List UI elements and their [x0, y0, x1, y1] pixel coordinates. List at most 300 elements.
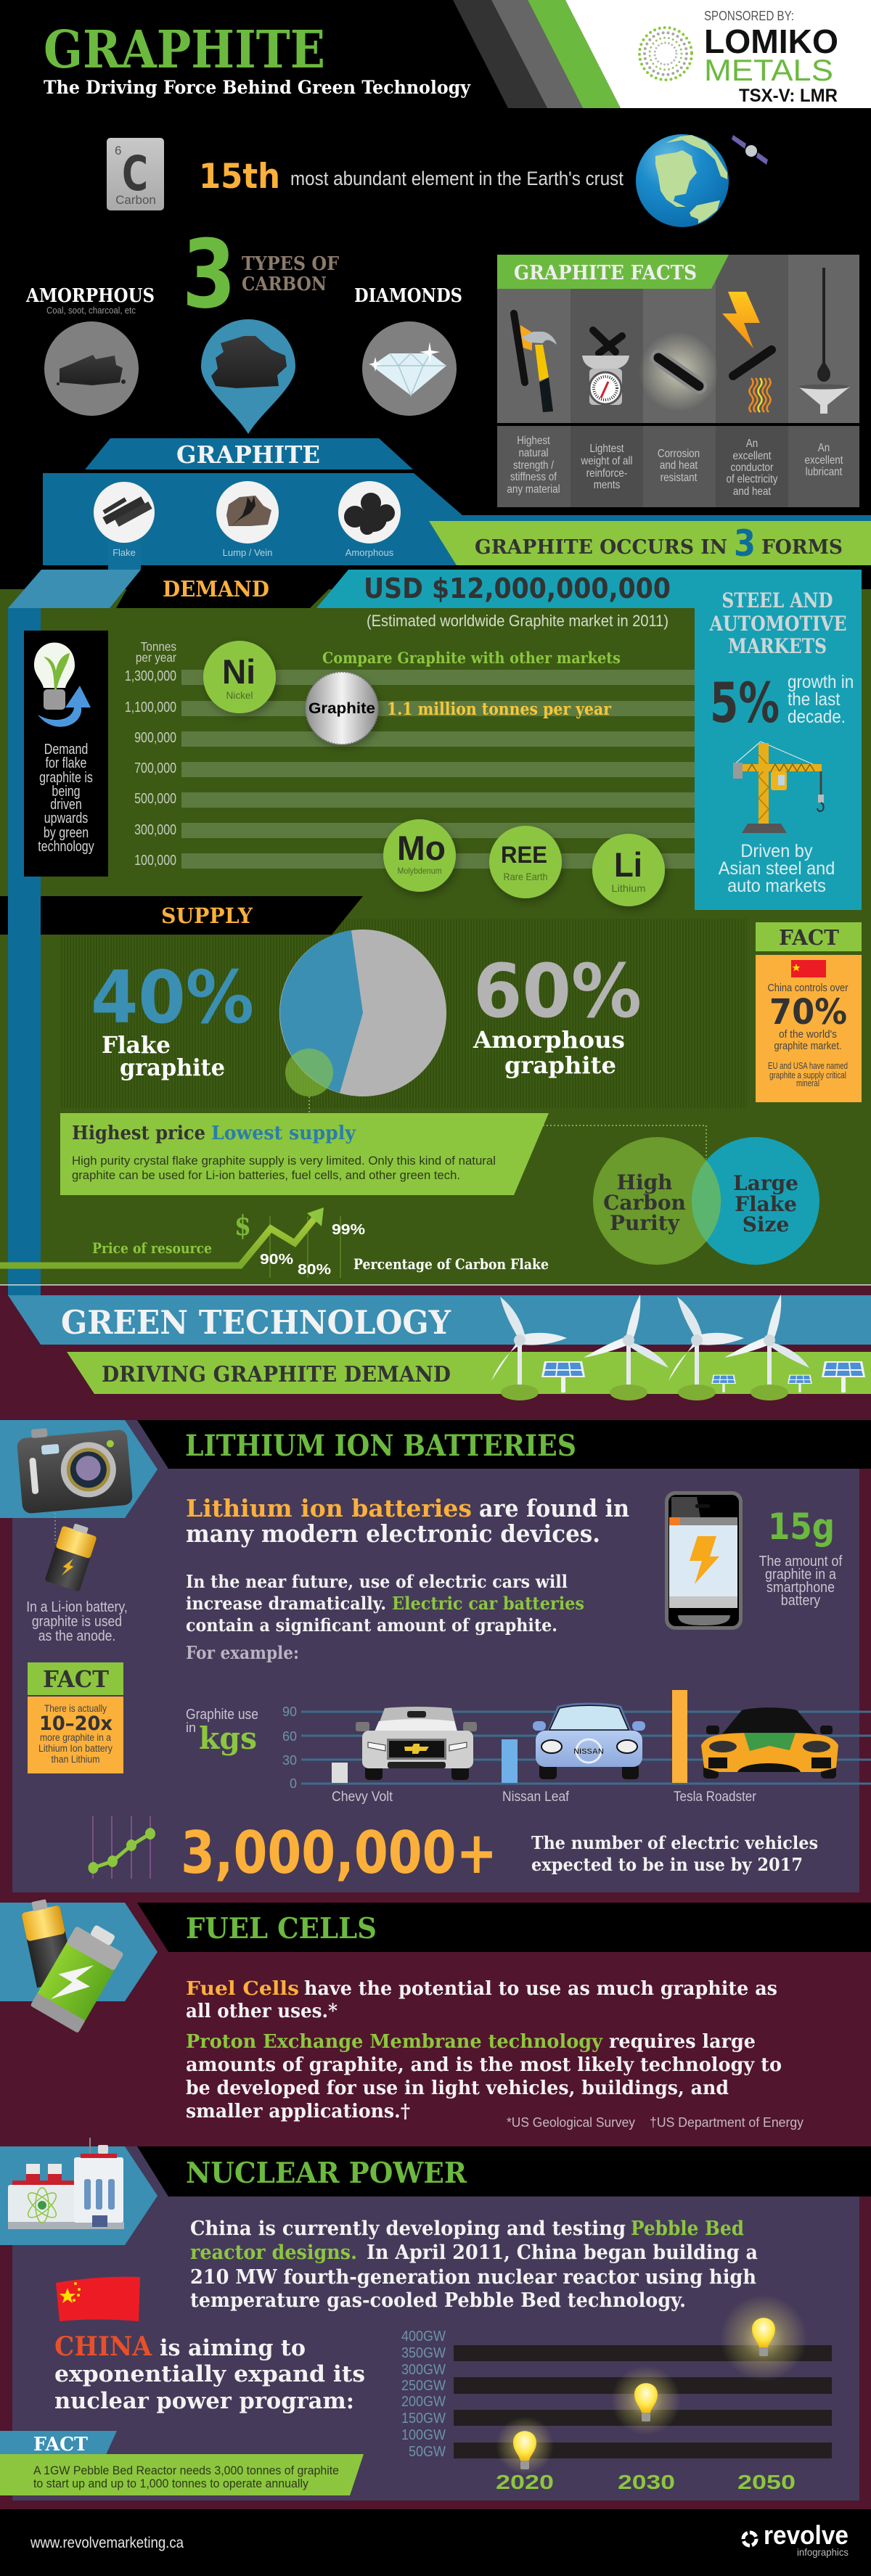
- purple body: [12, 1420, 859, 1892]
- icon: smartphone: [665, 1491, 743, 1630]
- fact box: than Lithium: [51, 1754, 100, 1765]
- y axis labels: [282, 1705, 297, 1791]
- 40 percent: 40%: [91, 955, 254, 1040]
- driving demand heading: DRIVING GRAPHITE DEMAND: [102, 1362, 451, 1387]
- car labels: Chevy Volt: [332, 1789, 393, 1805]
- electric cars paragraph: For example:: [186, 1642, 299, 1663]
- flake graphite label: [102, 1031, 225, 1081]
- panel: supply: [0, 896, 862, 1296]
- growth note: growth in: [788, 672, 854, 692]
- rare earth bubble: REE: [501, 842, 547, 868]
- china paragraph: 210 MW fourth-generation nuclear reactor using high: [190, 2266, 756, 2289]
- growth note: decade.: [788, 707, 846, 727]
- venn diagram: High: [616, 1170, 673, 1194]
- form labels: Flake: [113, 547, 136, 558]
- china paragraph: temperature gas-cooled Pebble Bed technology.: [190, 2289, 686, 2312]
- y axis labels: 300GW: [401, 2362, 446, 2378]
- bar chart: tonnes per year: [125, 639, 695, 906]
- price chart: 80%: [298, 1262, 331, 1278]
- 60 percent: 60%: [473, 948, 642, 1035]
- supply header band: [0, 896, 363, 935]
- big 3: 3: [182, 219, 236, 329]
- nickel bubble: [203, 641, 276, 713]
- pem paragraph: amounts of graphite, and is the most likely technology to: [186, 2054, 782, 2076]
- growth note: the last: [788, 689, 841, 710]
- intro statement: many modern electronic devices.: [186, 1519, 600, 1548]
- highest price panel: High purity crystal flake graphite supply is very limited. Only this kind of natural: [72, 1154, 496, 1168]
- blue icon tab: [0, 1420, 158, 1518]
- chart bands: [454, 2345, 832, 2458]
- price chart: 99%: [332, 1222, 365, 1238]
- year labels: 2030: [618, 2471, 675, 2493]
- bulb 2020: [496, 2416, 554, 2474]
- electric cars paragraph: increase dramatically.: [186, 1593, 386, 1614]
- pem paragraph: Proton Exchange Membrane technology: [186, 2031, 603, 2053]
- icon: bolt conductor: [722, 292, 772, 412]
- icon: corrosion resistant stick: [639, 332, 719, 411]
- y axis labels: [401, 2329, 446, 2460]
- fact body box: [756, 955, 862, 1102]
- fact text: strength: stiffness of: [510, 471, 557, 483]
- panel: lithium ion batteries: [0, 1420, 871, 1892]
- fact body box: graphite market.: [774, 1040, 842, 1052]
- 15th: 15th: [199, 157, 280, 197]
- sidebar text: technology: [38, 838, 95, 854]
- fact body box: mineral: [796, 1078, 819, 1088]
- car labels: [332, 1789, 757, 1805]
- header: [44, 0, 871, 108]
- chart: nuclear capacity: [401, 2294, 832, 2493]
- header stripes: [453, 0, 621, 108]
- abundance statement: most abundant element in the Earth's crust: [290, 168, 623, 189]
- electric cars paragraph: Electric car batteries: [392, 1593, 584, 1614]
- panel: green technology banners: [8, 1295, 871, 1400]
- molybdenum bubble: [383, 819, 456, 892]
- molybdenum bubble: Molybdenum: [398, 866, 442, 876]
- sources: *US Geological Survey: [507, 2115, 635, 2130]
- intro statement: are found in: [479, 1494, 629, 1522]
- graphite tonnage: 1.1 million tonnes per year: [387, 700, 612, 719]
- fact heading box: [756, 922, 862, 951]
- pie chart: [279, 930, 446, 1096]
- dotted link: [54, 1513, 56, 1543]
- fact heading box: FACT: [779, 925, 839, 950]
- china statement: nuclear power program:: [54, 2388, 354, 2414]
- highlight circle: [285, 1049, 333, 1113]
- demand heading: DEMAND: [163, 577, 269, 602]
- three million caption: [531, 1832, 818, 1875]
- y axis labels: 200GW: [401, 2394, 446, 2410]
- demand header band: [116, 570, 348, 608]
- anode caption: as the anode.: [38, 1628, 115, 1644]
- page background: green demand and supply section: [0, 589, 871, 1284]
- graphite heading: GRAPHITE: [176, 440, 320, 469]
- icon: graphite pin: [201, 319, 295, 434]
- icon: lubricant funnel: [798, 268, 850, 414]
- price chart: 90%: [260, 1252, 293, 1268]
- icon: scale: [582, 330, 629, 405]
- fact text: weight: weight of all: [581, 455, 632, 467]
- highest price panel: [60, 1113, 549, 1195]
- facts heading: GRAPHITE FACTS: [514, 262, 697, 284]
- facts banner: [497, 255, 729, 289]
- blue icon tab: [0, 2146, 158, 2245]
- y axis labels: 100GW: [401, 2427, 446, 2443]
- page background: maroon green technology section: [0, 1285, 871, 2509]
- y axis labels: 30: [282, 1753, 297, 1768]
- sources: †US Department of Energy: [650, 2115, 803, 2130]
- fact body: [0, 2454, 364, 2495]
- intro statement: [186, 1494, 629, 1548]
- types of carbon: TYPES OF: [242, 253, 339, 275]
- fact box: Lithium Ion battery: [38, 1743, 113, 1754]
- amorphous graphite label: [473, 1026, 625, 1079]
- icon: tesla roadster: [701, 1707, 838, 1779]
- y axis title: per year: [136, 650, 176, 665]
- icon: chevy volt: [356, 1707, 477, 1780]
- 15g caption: graphite in a: [765, 1567, 836, 1583]
- icon: revolve logo: [743, 2532, 756, 2546]
- anode caption: graphite is used: [32, 1613, 122, 1629]
- chart title: kgs: [199, 1720, 257, 1756]
- fact text: lubricant: An: [818, 442, 830, 454]
- growth mini chart: [89, 1816, 155, 1879]
- fact text: strength: natural: [518, 447, 549, 459]
- section header band: [137, 1903, 871, 1952]
- fact text: conductor: An: [746, 438, 758, 450]
- fact body box: 70%: [769, 992, 847, 1033]
- driven by note: Asian steel and: [719, 858, 835, 879]
- fact text: strength: any material: [507, 483, 560, 496]
- market value: USD $12,000,000,000: [364, 573, 671, 604]
- icon: lump vein: [216, 481, 279, 543]
- logo: dotted ring: [639, 28, 692, 80]
- venn diagram: Carbon: [603, 1191, 686, 1215]
- icon: globe: [636, 134, 729, 227]
- price chart: [0, 1207, 549, 1278]
- china statement: CHINA: [54, 2331, 152, 2362]
- fuel cells statement: all other uses.*: [186, 2001, 338, 2022]
- three million caption: The number of electric vehicles: [531, 1832, 818, 1853]
- pem paragraph: be developed for use in light vehicles, buildings, and: [186, 2077, 729, 2099]
- heading: NUCLEAR POWER: [186, 2157, 467, 2190]
- graphite bubble: Graphite: [308, 700, 375, 717]
- fact box: 10–20x: [39, 1712, 113, 1735]
- wind turbines and solar panels: [491, 1295, 865, 1400]
- graphite trapezoid: [85, 438, 413, 469]
- car labels: Nissan Leaf: [502, 1789, 570, 1805]
- supply heading: SUPPLY: [161, 903, 253, 928]
- fuel cells statement: [186, 1978, 777, 2022]
- driven by note: auto markets: [727, 876, 826, 896]
- 15g caption: smartphone: [766, 1580, 835, 1596]
- flake graphite label: Flake: [102, 1031, 171, 1059]
- y axis labels: 400GW: [401, 2329, 446, 2345]
- fact text: strength: strength /: [513, 459, 555, 472]
- compare heading: Compare Graphite with other markets: [322, 649, 621, 667]
- column backgrounds: [497, 255, 859, 507]
- intro statement: Lithium ion batteries: [186, 1494, 472, 1522]
- carbon element tile: C: [122, 146, 148, 202]
- flake flow: vertical connector: [8, 570, 141, 1296]
- y axis labels: 300,000: [134, 821, 176, 837]
- amorphous label: Coal, soot, charcoal, etc: [46, 305, 136, 316]
- lithium bubble: [592, 834, 665, 906]
- fact body: A 1GW Pebble Bed Reactor needs 3,000 tonnes of graphite: [33, 2464, 339, 2477]
- panel: demand sidebar: [24, 631, 108, 877]
- steel heading: STEEL AND: [721, 588, 833, 612]
- icon: reactor: [8, 2138, 124, 2229]
- fact body box: of the world's: [779, 1028, 837, 1041]
- carbon element tile: 6: [115, 144, 121, 157]
- fact box: There is actually: [44, 1703, 107, 1714]
- pem paragraph: smaller applications.†: [186, 2101, 410, 2122]
- year labels: [496, 2471, 796, 2493]
- y axis labels: 150GW: [401, 2411, 446, 2427]
- y axis labels: 350GW: [401, 2345, 446, 2361]
- panel: market value and steel markets: [316, 570, 862, 910]
- fact text: lubricant: excellent: [804, 454, 843, 467]
- carbon element tile: Carbon: [115, 193, 156, 207]
- electric cars paragraph: In the near future, use of electric cars will: [186, 1571, 568, 1592]
- three million: 3,000,000+: [181, 1819, 497, 1887]
- infographics label: infographics: [797, 2546, 848, 2558]
- sidebar text: driven: [50, 796, 82, 812]
- fact tab: [0, 2431, 117, 2456]
- fact box: [28, 1662, 123, 1773]
- fact body box: graphite a supply critical: [769, 1070, 846, 1080]
- sidebar text: Demand: [44, 741, 88, 757]
- types of carbon: CARBON: [242, 274, 327, 295]
- diamonds label: DIAMONDS: [354, 285, 462, 307]
- china paragraph: Pebble Bed: [631, 2218, 744, 2240]
- y axis labels: 1,300,000: [125, 668, 176, 684]
- car labels: Tesla Roadster: [674, 1789, 757, 1805]
- fact text: weight: ments: [594, 479, 620, 491]
- icon: batteries: [20, 1897, 129, 2033]
- icon: china flag small: [791, 960, 826, 977]
- amorphous graphite label: graphite: [504, 1051, 616, 1079]
- title: GRAPHITE: [44, 19, 325, 80]
- molybdenum bubble: Mo: [397, 829, 446, 867]
- website: www.revolvemarketing.ca: [30, 2535, 184, 2551]
- y axis labels: 100,000: [134, 852, 176, 868]
- china paragraph: reactor designs.: [190, 2241, 357, 2264]
- flake connector: [108, 539, 141, 570]
- fact text: conductor: of electricity: [727, 473, 778, 485]
- sidebar text: upwards: [44, 810, 88, 826]
- 15g: 15g: [768, 1506, 835, 1548]
- bulb 2030: [611, 2366, 681, 2435]
- price chart: Price of resource: [92, 1239, 212, 1257]
- three million caption: expected to be in use by 2017: [531, 1854, 803, 1875]
- venn diagram: [593, 1137, 819, 1265]
- chart title: Graphite use: [186, 1707, 258, 1723]
- fact text: conductor: conductor: [731, 462, 774, 474]
- green technology heading: GREEN TECHNOLOGY: [61, 1303, 451, 1342]
- y axis labels: 250GW: [401, 2378, 446, 2394]
- fact body: to start up and up to 1,000 tonnes to operate annually: [33, 2477, 308, 2490]
- icon: amorphous coal: [44, 321, 139, 416]
- icon: hammer and stick: [514, 313, 557, 412]
- page background: black footer: [0, 2509, 871, 2576]
- sponsored by label: SPONSORED BY:: [704, 9, 794, 23]
- price chart: Percentage of Carbon Flake: [353, 1255, 549, 1273]
- lithium bubble: Li: [614, 845, 642, 884]
- icon: nissan leaf: NISSAN: [573, 1747, 604, 1756]
- y axis labels: 900,000: [134, 729, 176, 745]
- china paragraph: China is currently developing and testing: [190, 2218, 626, 2240]
- y axis title: Tonnes: [141, 639, 176, 654]
- steel and automotive markets: [709, 588, 854, 896]
- y axis labels: 50GW: [409, 2444, 446, 2460]
- anode caption: In a Li-ion battery,: [26, 1599, 128, 1615]
- pem paragraph: [186, 2031, 782, 2122]
- carbon element tile: [107, 138, 164, 210]
- occurs heading: GRAPHITE OCCURS IN: [475, 536, 727, 559]
- fact box: more graphite in a: [40, 1732, 111, 1743]
- heading: LITHIUM ION BATTERIES: [185, 1429, 576, 1463]
- market note: (Estimated worldwide Graphite market in 2011): [367, 612, 668, 630]
- green banner: [67, 1352, 871, 1394]
- venn diagram: Size: [743, 1213, 789, 1236]
- dotted connector: [543, 1125, 706, 1159]
- fuel cells statement: have the potential to use as much graphite as: [304, 1978, 777, 2000]
- occurs heading: 3: [734, 522, 756, 565]
- flow connector over band: [8, 896, 41, 1296]
- icon: flake: [94, 482, 155, 543]
- y axis labels: 1,100,000: [125, 699, 176, 715]
- chart bands: [181, 670, 695, 869]
- carbon abundance row: [107, 134, 768, 227]
- rare earth bubble: [489, 826, 562, 898]
- icon: china flag: [56, 2277, 140, 2321]
- nickel bubble: Ni: [222, 652, 255, 691]
- y axis labels: 500,000: [134, 790, 176, 806]
- electric cars paragraph: contain a significant amount of graphite.: [186, 1615, 557, 1636]
- highest price panel: Highest price: [72, 1123, 205, 1144]
- types of carbon: [242, 253, 339, 295]
- fact text: corrosion: Corrosion: [658, 448, 700, 460]
- steel heading: MARKETS: [728, 634, 827, 658]
- bars: [332, 1690, 687, 1783]
- amorphous label: AMORPHOUS: [25, 285, 155, 307]
- blue icon tab: [0, 1903, 158, 2001]
- y axis labels: 90: [282, 1705, 297, 1719]
- year labels: 2020: [496, 2471, 554, 2493]
- venn diagram: Large: [733, 1171, 798, 1195]
- flake graphite label: graphite: [120, 1054, 225, 1081]
- steel heading: [709, 588, 846, 658]
- fact text: conductor: and heat: [733, 485, 771, 498]
- chart: graphite use per car: [186, 1690, 871, 1805]
- panel: three types of carbon: [25, 219, 462, 434]
- subtitle: The Driving Force Behind Green Technology: [44, 77, 471, 98]
- form labels: Lump / Vein: [223, 547, 272, 558]
- fact text: weight: Lightest: [589, 443, 624, 455]
- occurs heading: FORMS: [761, 536, 843, 559]
- divider line: [0, 1284, 871, 1286]
- sidebar text: for flake: [46, 755, 86, 771]
- form labels: Amorphous: [345, 547, 394, 558]
- highest price panel: Lowest supply: [211, 1123, 356, 1144]
- fact text: corrosion: resistant: [661, 472, 697, 484]
- china statement: is aiming to: [160, 2335, 306, 2361]
- rare earth bubble: Rare Earth: [504, 871, 547, 882]
- sidebar text: graphite is: [39, 769, 93, 785]
- fuel cells statement: Fuel Cells: [186, 1978, 299, 2000]
- revolve wordmark: revolve: [764, 2520, 848, 2550]
- sidebar text: being: [52, 783, 81, 799]
- five percent: 5%: [710, 670, 780, 735]
- y axis labels: 60: [282, 1729, 297, 1744]
- sponsor panel: [565, 0, 871, 108]
- fact text: strength: Highest: [517, 435, 550, 447]
- panel: nuclear power: [0, 2138, 871, 2501]
- gridlines: [301, 1711, 871, 1785]
- icon: bulb with sprout: [34, 643, 91, 727]
- lithium bubble: Lithium: [611, 882, 646, 894]
- steel heading: AUTOMOTIVE: [709, 612, 846, 636]
- panel: fuel cells: [0, 1897, 871, 2130]
- driven by note: Driven by: [740, 841, 813, 861]
- china paragraph: [190, 2218, 758, 2312]
- occurs heading: [475, 522, 843, 565]
- icon: satellite: [732, 135, 768, 165]
- Metals wordmark: METALS: [704, 53, 833, 87]
- section header band: [137, 1420, 871, 1469]
- nickel bubble: Nickel: [226, 689, 253, 701]
- fact text: lubricant: lubricant: [806, 466, 842, 478]
- fact text: conductor: excellent: [732, 450, 772, 462]
- year labels: 2050: [737, 2471, 796, 2493]
- icon: crane: [733, 742, 824, 833]
- icon: camera: [16, 1422, 133, 1514]
- blue banner: [8, 1295, 871, 1345]
- icon: nissan leaf: [533, 1702, 645, 1779]
- purple body: [12, 2146, 859, 2501]
- occurs banner: [429, 521, 871, 565]
- y axis labels: 0: [290, 1776, 297, 1791]
- venn diagram: Flake: [735, 1192, 797, 1216]
- form labels: [113, 547, 394, 558]
- venn diagram: Purity: [610, 1211, 680, 1235]
- icon: amorphous: [338, 481, 401, 543]
- fact text: weight: reinforce-: [586, 467, 627, 480]
- panel: graphite forms: [43, 438, 871, 570]
- amorphous label: [25, 285, 155, 316]
- panel: graphite facts: [497, 255, 859, 507]
- pem paragraph: requires large: [609, 2031, 756, 2053]
- ticker: TSX-V: LMR: [739, 86, 838, 106]
- amorphous graphite label: Amorphous: [473, 1026, 625, 1054]
- fact tab: FACT: [33, 2434, 89, 2456]
- y axis labels: 700,000: [134, 760, 176, 776]
- china statement: exponentially expand its: [54, 2361, 365, 2387]
- heading: FUEL CELLS: [186, 1912, 377, 1945]
- Lomiko wordmark: LOMIKO: [704, 22, 838, 60]
- sources: [507, 2115, 803, 2130]
- price chart: $: [234, 1209, 251, 1242]
- china paragraph: In April 2011, China began building a: [367, 2241, 758, 2264]
- highest price panel: graphite can be used for Li-ion batteries, fuel cells, and other green tech.: [72, 1168, 460, 1182]
- bulb 2050: [720, 2294, 807, 2382]
- y axis labels: [125, 668, 176, 868]
- footer: [30, 2520, 848, 2558]
- blue forms panel: [43, 473, 871, 565]
- sidebar text: by green: [44, 824, 89, 840]
- fact body box: EU and USA have named: [768, 1061, 848, 1071]
